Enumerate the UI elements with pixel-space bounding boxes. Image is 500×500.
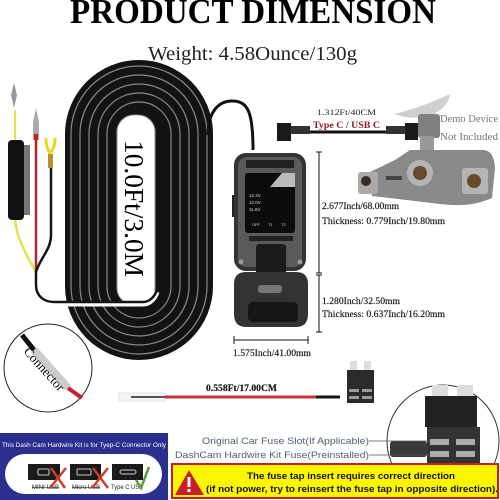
coiled cable <box>65 60 213 360</box>
connector compatibility panel <box>0 433 168 500</box>
dimension labels: Thickness: 0.779Inch/19.80mm <box>322 217 446 227</box>
dimension labels: 1.280Inch/32.50mm <box>322 297 401 307</box>
fuse callouts <box>175 436 430 461</box>
fuse callouts: DashCam Hardwire Kit Fuse(Preinstalled) <box>175 450 369 461</box>
connector compatibility panel: Type C USB <box>111 485 143 491</box>
dimension labels <box>206 202 446 394</box>
usb-c length labels <box>313 107 380 130</box>
weight text: Weight: 4.58Ounce/130g <box>148 43 357 65</box>
dimension labels: 2.677Inch/68.00mm <box>322 202 400 212</box>
usb-c length labels: 1.312Ft/40CM <box>317 107 377 117</box>
connector compatibility panel: Micro USB <box>72 485 100 491</box>
dimension labels: 0.558Ft/17.00CM <box>206 384 277 394</box>
inline fuse holder <box>8 140 30 220</box>
demo dash cam <box>358 94 495 205</box>
fuse tap detail circle <box>387 385 499 497</box>
dimension labels: Thickness: 0.637Inch/16.20mm <box>322 310 446 320</box>
power wires <box>11 83 157 304</box>
demo device note: Not Included <box>440 132 498 143</box>
warning box <box>172 464 498 498</box>
demo device note <box>440 114 499 143</box>
device body: T1 <box>268 222 273 227</box>
warning box: (if not power, try to reinsert the fuse tap in opposite direction). <box>206 484 498 495</box>
cable to device <box>208 101 253 150</box>
usb-c length labels: Type C / USB C <box>313 120 380 130</box>
warning box: The fuse tap insert requires correct direction <box>247 471 455 482</box>
cable length label: 10.0Ft/3.0M <box>119 140 149 277</box>
device body: T2 <box>281 222 286 227</box>
dimension labels: 1.575Inch/41.00mm <box>233 349 312 359</box>
device body: 12.0V <box>249 200 261 205</box>
device body <box>232 153 306 280</box>
device lower housing <box>234 272 308 327</box>
device body: 11.6V <box>249 207 260 212</box>
device body: 12.2V <box>249 193 261 198</box>
height dimension line <box>316 152 322 332</box>
fuse tap small <box>119 361 374 403</box>
connector detail circle: Connector <box>21 344 68 395</box>
fuse callouts: Original Car Fuse Slot(If Applicable) <box>202 436 369 447</box>
width dimension line <box>234 336 308 344</box>
demo device note: Demo Device <box>440 114 499 125</box>
usb-c cable <box>277 123 418 141</box>
connector compatibility panel: MINI USB <box>32 485 59 491</box>
device body: OFF <box>252 222 261 227</box>
connector detail circle <box>4 324 92 412</box>
connector compatibility panel: This Dash Cam Hardwire Kit is for Tyep-C Connector Only <box>2 442 167 449</box>
